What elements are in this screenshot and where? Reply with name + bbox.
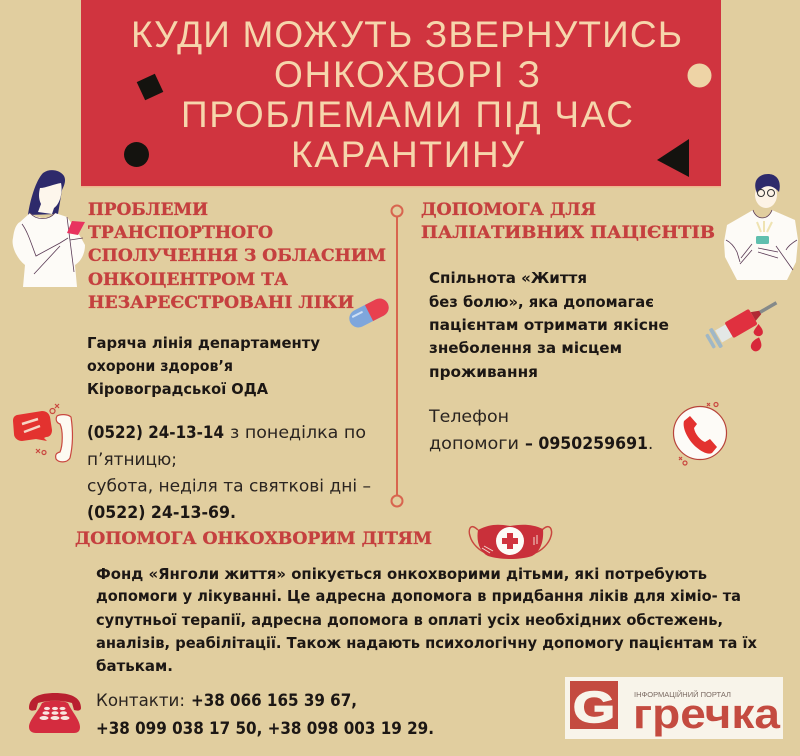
text: hotline: Гаряча лінія департаменту — [87, 334, 320, 352]
heading: transport problems: СПОЛУЧЕННЯ З ОБЛАСНИМ — [88, 246, 386, 266]
heading: palliative help — [421, 200, 715, 243]
text: contacts — [96, 691, 434, 738]
title: КУДИ МОЖУТЬ ЗВЕРНУТИСЬ — [131, 14, 682, 55]
text: help phone: – 0950259691 — [525, 434, 648, 453]
divider line — [392, 206, 402, 506]
text: phone schedule: (0522) 24-13-69. — [87, 503, 236, 522]
logo: Grechka portal: G — [573, 683, 615, 732]
icon: speech bubble and handset — [13, 404, 72, 462]
text: community description: пацієнтам отримати якісне — [429, 316, 669, 334]
text: foundation description: аналізів, реабілітації. Також надають психологічну допомогу пацієнтам та їх — [96, 634, 757, 652]
text: phone schedule: з понеділка по — [230, 423, 366, 442]
icon: woman with phone — [13, 170, 85, 287]
heading: transport problems: ПРОБЛЕМИ — [88, 200, 208, 220]
text: contacts: +38 066 165 39 67, — [191, 691, 357, 710]
text: community description — [429, 269, 669, 381]
logo: Grechka portal: гречка — [633, 690, 781, 737]
text: help phone: . — [648, 434, 653, 453]
text: hotline: охорони здоров’я — [87, 357, 233, 375]
icon: black diamond — [137, 74, 163, 100]
text: foundation description: Фонд «Янголи життя» опікується онкохворими дітьми, які потребують — [96, 565, 707, 583]
title: ОНКОХВОРІ З — [274, 54, 540, 95]
text: community description: знеболення за місцем — [429, 339, 622, 357]
text: help phone — [428, 407, 653, 453]
heading: palliative help: ПАЛІАТИВНИХ ПАЦІЄНТІВ — [421, 223, 715, 243]
panel: title banner — [81, 0, 721, 188]
heading: help for children: ДОПОМОГА ОНКОХВОРИМ ДІТЯМ — [75, 529, 432, 549]
title — [131, 14, 682, 175]
text: foundation description: допомоги у лікуванні. Це адресна допомога в придбання ліків для хіміо- та — [96, 587, 741, 605]
text: contacts: Контакти: — [96, 691, 185, 710]
text: help phone: Телефон — [428, 407, 509, 426]
text: phone schedule: п’ятницю; — [87, 450, 177, 469]
heading: transport problems: ТРАНСПОРТНОГО — [88, 223, 273, 243]
text: hotline — [87, 334, 320, 398]
icon: red telephone — [29, 693, 81, 733]
text: foundation description — [96, 565, 757, 675]
text: phone schedule — [87, 423, 371, 522]
text: community description: Спільнота «Життя — [429, 269, 587, 287]
heading: transport problems — [88, 200, 386, 313]
logo: Grechka portal: ІНФОРМАЦІЙНИЙ ПОРТАЛ — [634, 690, 731, 699]
text: hotline: Кіровоградської ОДА — [87, 380, 268, 398]
text: phone schedule: (0522) 24-13-14 — [87, 423, 224, 442]
heading: transport problems: НЕЗАРЕЄСТРОВАНІ ЛІКИ — [88, 293, 354, 313]
heading: transport problems: ОНКОЦЕНТРОМ ТА — [88, 270, 288, 290]
icon: black circle — [124, 142, 149, 167]
logo: Grechka portal — [565, 677, 783, 739]
icon: pill — [346, 295, 392, 331]
icon: black triangle — [657, 139, 689, 177]
title: ПРОБЛЕМАМИ ПІД ЧАС — [181, 94, 633, 135]
text: community description: проживання — [429, 363, 538, 381]
text: community description: без болю», яка допомагає — [429, 293, 654, 311]
text: phone schedule: субота, неділя та святкові дні – — [87, 476, 371, 496]
text: foundation description: супутньої терапії, адресна допомога в оплаті усіх необхідних обстежень, — [96, 611, 723, 629]
text: contacts: +38 099 038 17 50, +38 098 003 19 29. — [96, 719, 434, 738]
text: help phone: допомоги — [429, 434, 519, 453]
icon: beige circle — [688, 64, 712, 88]
icon: man with phone — [724, 174, 798, 280]
text: foundation description: батькам. — [96, 657, 173, 675]
icon: medical mask — [469, 525, 552, 559]
heading: palliative help: ДОПОМОГА ДЛЯ — [421, 200, 596, 220]
icon: phone in circle — [674, 402, 726, 465]
title: КАРАНТИНУ — [291, 134, 524, 175]
icon: syringe with drops — [704, 293, 782, 353]
